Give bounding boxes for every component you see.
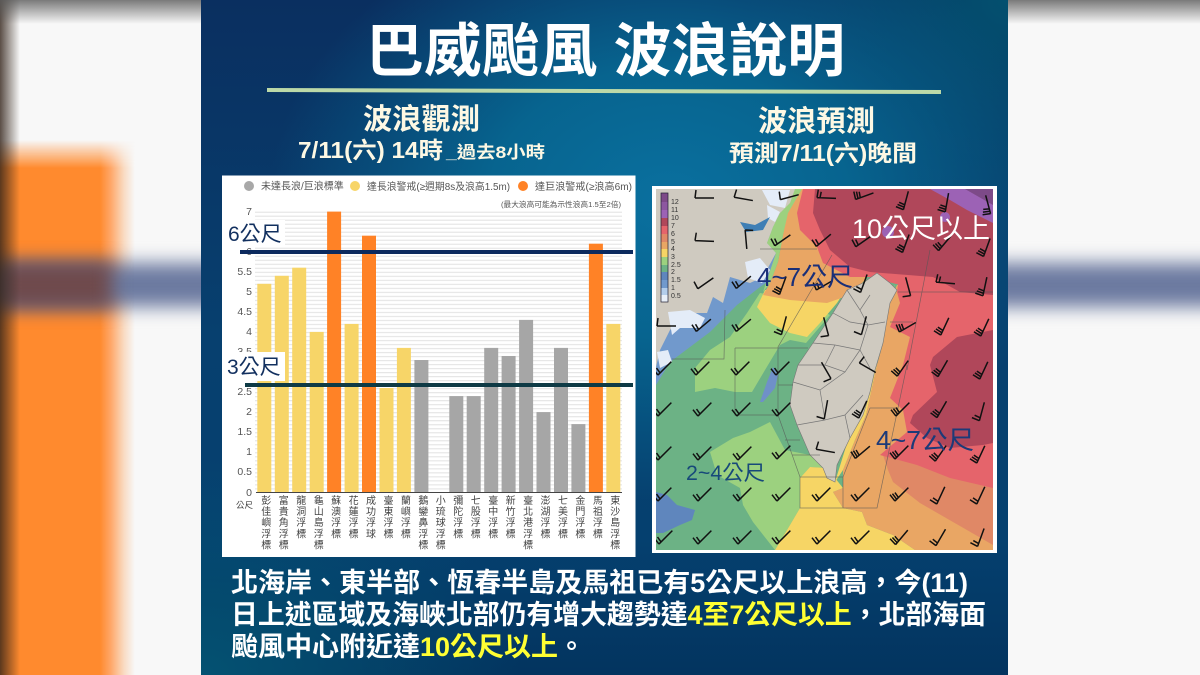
map label: 2 to 4 m: 2~4公尺 <box>686 462 765 485</box>
summary text: 北海岸、東半部、恆春半島及馬祖已有5公尺以上浪高，今(11) <box>231 568 968 598</box>
y axis labels: 2 <box>246 406 252 418</box>
summary text: 颱風中心附近達10公尺以上。 <box>231 632 585 662</box>
3 m threshold line and label <box>224 352 633 385</box>
orange band <box>833 285 993 550</box>
heading: wave forecast <box>729 105 917 166</box>
summary text: 日上述區域及海峽北部仍有增大趨勢達4至7公尺以上，北部海面 <box>231 600 986 630</box>
title: 巴威颱風 波浪說明 <box>366 19 845 84</box>
map colour scale: 1.5 <box>671 277 681 284</box>
station labels: 臺中浮標 <box>486 494 498 540</box>
station labels: 鵝鑾鼻浮標 <box>416 494 428 551</box>
y axis labels: 0 <box>246 487 252 499</box>
Taiwan <box>790 273 897 482</box>
y axis labels: 5 <box>246 286 252 298</box>
purple band <box>930 189 993 223</box>
map colour scale: 0.5 <box>671 293 681 300</box>
map colour scale: 3 <box>671 254 675 261</box>
station labels: 東沙島浮標 <box>608 494 620 551</box>
map colour scale: 6 <box>671 231 675 238</box>
heading: wave observation: 波浪觀測 <box>363 103 480 136</box>
station labels: 彭佳嶼浮標 <box>259 494 271 551</box>
coastal shallows <box>657 190 790 368</box>
map label: 4 to 7 m east: 4~7公尺 <box>876 425 974 455</box>
light green coastal strip <box>763 189 802 292</box>
heading: wave forecast: 波浪預測 <box>758 105 875 138</box>
station labels: 彌陀浮標 <box>451 495 463 540</box>
station labels: 臺北港浮標 <box>521 494 533 551</box>
Taiwan county lines <box>793 290 885 438</box>
bars <box>257 212 620 492</box>
map colour scale: 2 <box>671 269 675 276</box>
map colour scale: 5 <box>671 239 675 246</box>
y axis labels: 7 <box>246 206 252 218</box>
y axis labels: 4 <box>246 326 252 338</box>
chart legend: 未達長浪/巨浪標準 <box>261 180 344 192</box>
station labels: 龜山島浮標 <box>311 494 323 551</box>
y axis labels <box>237 206 252 499</box>
panel: wave observation bar chart <box>222 176 636 557</box>
station labels: 金門浮標 <box>573 494 585 540</box>
station labels: 臺東浮標 <box>381 494 393 540</box>
6 m threshold line and label: 6公尺 <box>228 223 282 246</box>
y axis labels: 2.5 <box>237 386 252 398</box>
station labels: 蘇澳浮標 <box>329 495 341 540</box>
blue coastal band <box>656 253 776 385</box>
station labels: 澎湖浮標 <box>538 495 550 540</box>
infographic panel background <box>201 0 1008 675</box>
station labels: 富貴角浮標 <box>276 494 288 551</box>
forecast zone outlines <box>672 249 993 508</box>
map colour scale: 1 <box>671 285 675 292</box>
station labels: 小琉球浮標 <box>433 495 445 551</box>
heading: wave observation <box>298 103 545 163</box>
heading: wave observation: _過去8小時 <box>445 143 545 162</box>
red band <box>880 270 993 488</box>
blurred background strip: left <box>0 0 201 675</box>
station labels: 花蓮浮標 <box>346 494 358 540</box>
mainland China <box>656 189 795 367</box>
y axis labels: 1.5 <box>237 426 252 438</box>
station labels <box>259 494 620 551</box>
y axis labels: 1 <box>246 446 252 458</box>
station labels: 七美浮標 <box>556 495 568 540</box>
station labels: 蘭嶼浮標 <box>398 494 410 540</box>
summary text <box>231 568 986 662</box>
map label: 10 m and above: 10公尺以上 <box>852 214 990 244</box>
chart legend: 達巨浪警戒(≥浪高6m) <box>535 180 632 193</box>
panel: wave forecast map <box>652 185 997 553</box>
station labels: 馬祖浮標 <box>590 495 602 540</box>
6 m threshold line and label <box>224 220 633 252</box>
axis unit: 公尺 <box>236 500 254 510</box>
chart legend: 達長浪警戒(≥週期8s及浪高1.5m) <box>367 180 510 193</box>
station labels: 龍洞浮標 <box>294 494 306 540</box>
Penghu shallow patch <box>760 367 778 402</box>
station labels: 七股浮標 <box>468 495 480 540</box>
map colour scale: 7 <box>671 223 675 230</box>
map colour scale: 2.5 <box>671 262 681 269</box>
y axis labels: 3.5 <box>237 346 252 358</box>
map colour scale <box>661 193 681 302</box>
map label: 4 to 7 m north: 4~7公尺 <box>757 262 853 292</box>
y axis labels: 4.5 <box>237 306 252 318</box>
chart note: (最大浪高可能為示性浪高1.5至2倍) <box>501 199 622 209</box>
map colour scale: 11 <box>671 207 678 214</box>
map colour scale: 4 <box>671 246 675 253</box>
page artwork <box>222 20 997 659</box>
map colour scale: 10 <box>671 215 679 222</box>
deep red band <box>813 189 993 295</box>
chart legend <box>244 180 632 193</box>
y axis labels: 0.5 <box>237 466 252 478</box>
heading: wave observation: 7/11(六) 14時 <box>298 137 443 163</box>
station labels: 新竹浮標 <box>503 494 515 540</box>
wind barbs <box>652 185 991 546</box>
heading: wave forecast: 預測7/11(六)晚間 <box>729 140 917 166</box>
sea height bands <box>656 189 915 550</box>
station labels: 成功浮球 <box>364 495 376 540</box>
title underline <box>267 90 941 92</box>
blurred background strip: right <box>1008 0 1200 675</box>
y axis labels: 6 <box>246 246 252 258</box>
3 m threshold line and label: 3公尺 <box>227 356 281 379</box>
y axis labels: 5.5 <box>237 266 252 278</box>
map colour scale: 12 <box>671 199 679 206</box>
